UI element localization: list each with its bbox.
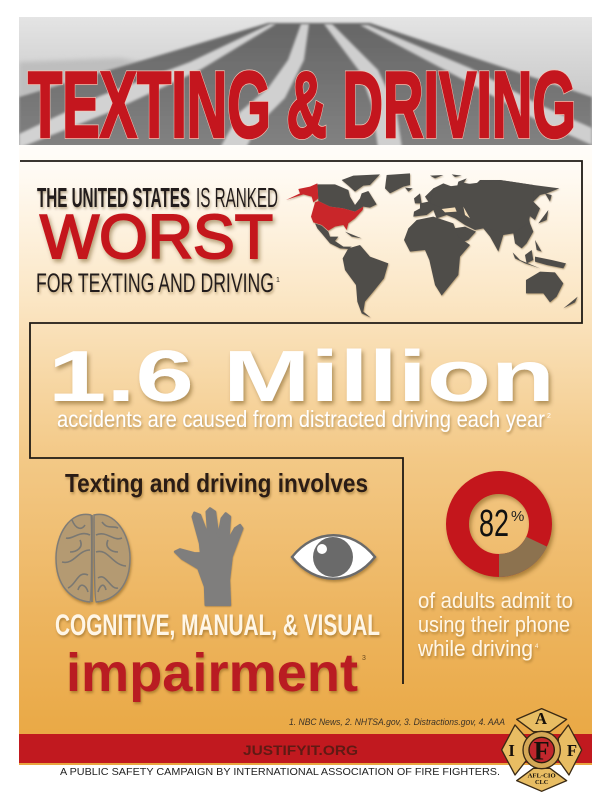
donut label: 82 <box>479 503 509 545</box>
icon: brain <box>56 514 130 602</box>
logo: IAFF maltese cross: AFL-CIO <box>528 772 556 779</box>
stat: 1.6 million: 1.6 Million <box>48 337 555 417</box>
background panel <box>19 145 592 765</box>
map: South America <box>343 245 388 318</box>
footnote marker 1: 1 <box>276 277 280 284</box>
donut chart: 82 percent <box>458 482 547 577</box>
footnote marker 2: 2 <box>547 413 551 420</box>
heading: the united states: THE UNITED STATES <box>37 182 190 213</box>
red footer bar <box>19 734 592 763</box>
map: United States highlighted <box>286 183 363 231</box>
banner: road photo <box>19 17 592 150</box>
map: inland seas <box>442 207 470 218</box>
website: JUSTIFYIT.ORG <box>243 742 358 758</box>
logo: IAFF maltese cross: CLC <box>535 779 549 786</box>
icon: eye <box>292 535 375 579</box>
text: accidents caused: accidents are caused from distracted driving each year <box>57 406 545 432</box>
text: cognitive manual visual: COGNITIVE, MANUAL, & VISUAL <box>55 609 380 642</box>
world map: eastern hemisphere <box>404 174 578 308</box>
logo: IAFF maltese cross: F <box>567 741 577 760</box>
map: Canada and Arctic <box>315 173 410 249</box>
text: adults admit: 4 <box>535 644 539 650</box>
logo: IAFF maltese cross: F <box>534 736 550 765</box>
text: adults admit <box>417 588 573 661</box>
logo: IAFF maltese cross: A <box>535 709 547 728</box>
logo: IAFF maltese cross <box>502 709 582 791</box>
text: adults admit: of adults admit to <box>418 588 573 613</box>
sources: 1. NBC News, 2. NHTSA.gov, 3. Distractions.gov, 4. AAA <box>289 717 505 727</box>
icon: hand <box>175 508 242 605</box>
campaign line: A PUBLIC SAFETY CAMPAIGN BY INTERNATIONAL ASSOCIATION OF FIRE FIGHTERS. <box>60 766 500 778</box>
footnote marker 3: 3 <box>362 655 366 662</box>
donut label: % <box>511 508 524 525</box>
logo: IAFF maltese cross: I <box>508 741 515 760</box>
panel frame: top section <box>20 161 582 684</box>
heading: texting and driving involves: Texting and driving involves <box>65 468 368 498</box>
text: for texting and driving: FOR TEXTING AND DRIVING <box>36 268 274 298</box>
text: impairment: impairment <box>66 643 358 703</box>
heading: worst: WORST <box>40 203 273 272</box>
text: adults admit: while driving <box>417 636 533 661</box>
world map: americas <box>286 173 410 318</box>
heading: the united states: IS RANKED <box>196 182 278 213</box>
text: adults admit: using their phone <box>418 612 570 637</box>
